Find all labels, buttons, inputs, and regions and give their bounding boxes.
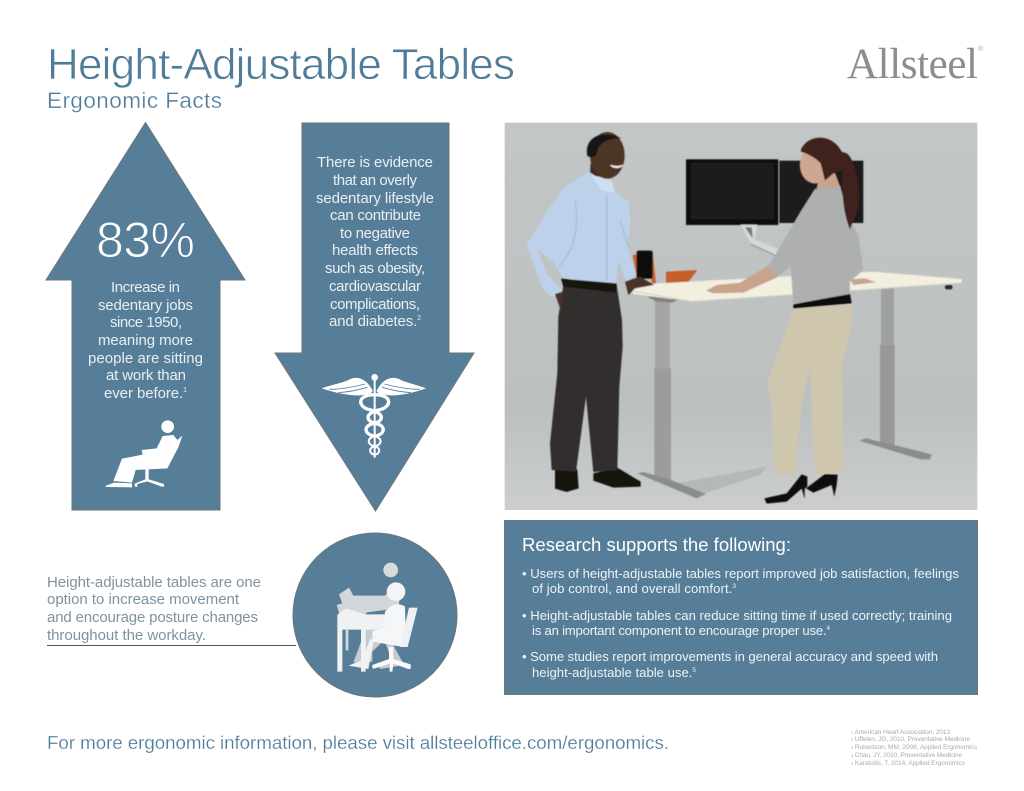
icon: caduceus	[322, 374, 426, 458]
text: sedentary lifestyle evidence: to negative	[340, 225, 410, 242]
text: sedentary jobs: at work than	[106, 367, 186, 384]
bullet: accuracy and speed: height-adjustable table use.	[532, 665, 692, 680]
references: 1 American Heart Association, 2013	[851, 729, 950, 736]
bullet: job satisfaction: 3	[732, 583, 736, 590]
text: height-adjustable tables option: option to increase movement	[47, 591, 240, 608]
text: sedentary jobs: ever before.	[104, 385, 183, 402]
table legs	[637, 288, 932, 498]
text: sedentary lifestyle evidence: complications,	[330, 296, 420, 313]
man	[527, 132, 654, 492]
orange desktop accessories	[633, 251, 697, 283]
text: height-adjustable tables option: and encourage posture changes	[47, 609, 258, 626]
text: sedentary jobs: Increase in	[111, 279, 180, 296]
text: sedentary jobs	[88, 279, 203, 402]
bullet: job satisfaction	[522, 566, 959, 596]
text: sedentary lifestyle evidence	[316, 154, 434, 330]
monitors	[686, 159, 863, 257]
text: sedentary lifestyle evidence: health effects	[332, 242, 418, 259]
bullet: accuracy and speed	[522, 649, 938, 680]
text: height-adjustable tables option	[47, 574, 261, 644]
table top	[631, 272, 962, 302]
text: sedentary lifestyle evidence: There is evidence	[317, 154, 433, 171]
bullet: job satisfaction: • Users of height-adjustable tables report improved job satisfaction, feelings	[522, 566, 959, 581]
text: height-adjustable tables option: Height-adjustable tables are one	[47, 574, 261, 591]
references: 5 Karakolis, T, 2014, Applied Ergonomics	[851, 760, 966, 767]
bullet: sitting time: • Height-adjustable tables can reduce sitting time if used correctly; training	[522, 608, 952, 623]
icon: circle with people at adjustable desk	[293, 533, 457, 697]
text: sedentary jobs: 1	[183, 387, 187, 394]
woman	[706, 138, 876, 504]
bullet: accuracy and speed: • Some studies report improvements in general accuracy and speed with	[522, 649, 938, 664]
heading: research supports: Research supports the following:	[522, 534, 791, 555]
logo: Allsteel: ®	[978, 45, 984, 53]
references: 2 Uffelen, JG, 2010, Preventative Medicine	[851, 736, 970, 743]
references: 3 Robertson, MM, 2008, Applied Ergonomics	[851, 744, 978, 751]
panel: up arrow 83%	[46, 122, 245, 510]
icon: reclining seated person	[105, 420, 182, 487]
photo: two people at a height-adjustable table	[505, 123, 977, 510]
text: sedentary lifestyle evidence: such as obesity,	[325, 260, 425, 277]
bullet: sitting time: 4	[826, 625, 830, 632]
text: sedentary jobs: sedentary jobs	[98, 297, 193, 314]
footer link: For more ergonomic information, please visit allsteeloffice.com/ergonomics.	[47, 732, 669, 753]
text: sedentary jobs: meaning more	[98, 332, 193, 349]
references: 4 Chau, JY, 2010, Preventative Medicine	[851, 752, 962, 759]
bullet: job satisfaction: of job control, and overall comfort.	[532, 581, 732, 596]
text: height-adjustable tables option: throughout the workday.	[47, 627, 206, 644]
bullet: sitting time: is an important component to encourage proper use.	[532, 623, 827, 638]
bullet: sitting time	[522, 608, 952, 638]
text: sedentary lifestyle evidence: and diabetes.	[329, 313, 417, 330]
text: sedentary jobs: since 1950,	[110, 314, 182, 331]
logo: Allsteel: Allsteel	[847, 41, 978, 88]
text: sedentary lifestyle evidence: cardiovascular	[329, 278, 421, 295]
subtitle: Ergonomic Facts	[47, 88, 222, 113]
text: sedentary lifestyle evidence: sedentary lifestyle	[316, 190, 434, 207]
text: sedentary lifestyle evidence: can contribute	[330, 207, 421, 224]
text: sedentary jobs: people are sitting	[88, 350, 203, 367]
panel: research	[504, 520, 978, 694]
text: sedentary lifestyle evidence: 2	[417, 315, 421, 322]
text: sedentary lifestyle evidence: that an overly	[333, 172, 418, 189]
title: Height-Adjustable Tables	[47, 40, 515, 89]
panel: down arrow evidence	[275, 123, 474, 511]
stat: 83%: 83%	[96, 212, 195, 268]
references	[851, 729, 978, 767]
bullet: accuracy and speed: 5	[692, 667, 696, 674]
